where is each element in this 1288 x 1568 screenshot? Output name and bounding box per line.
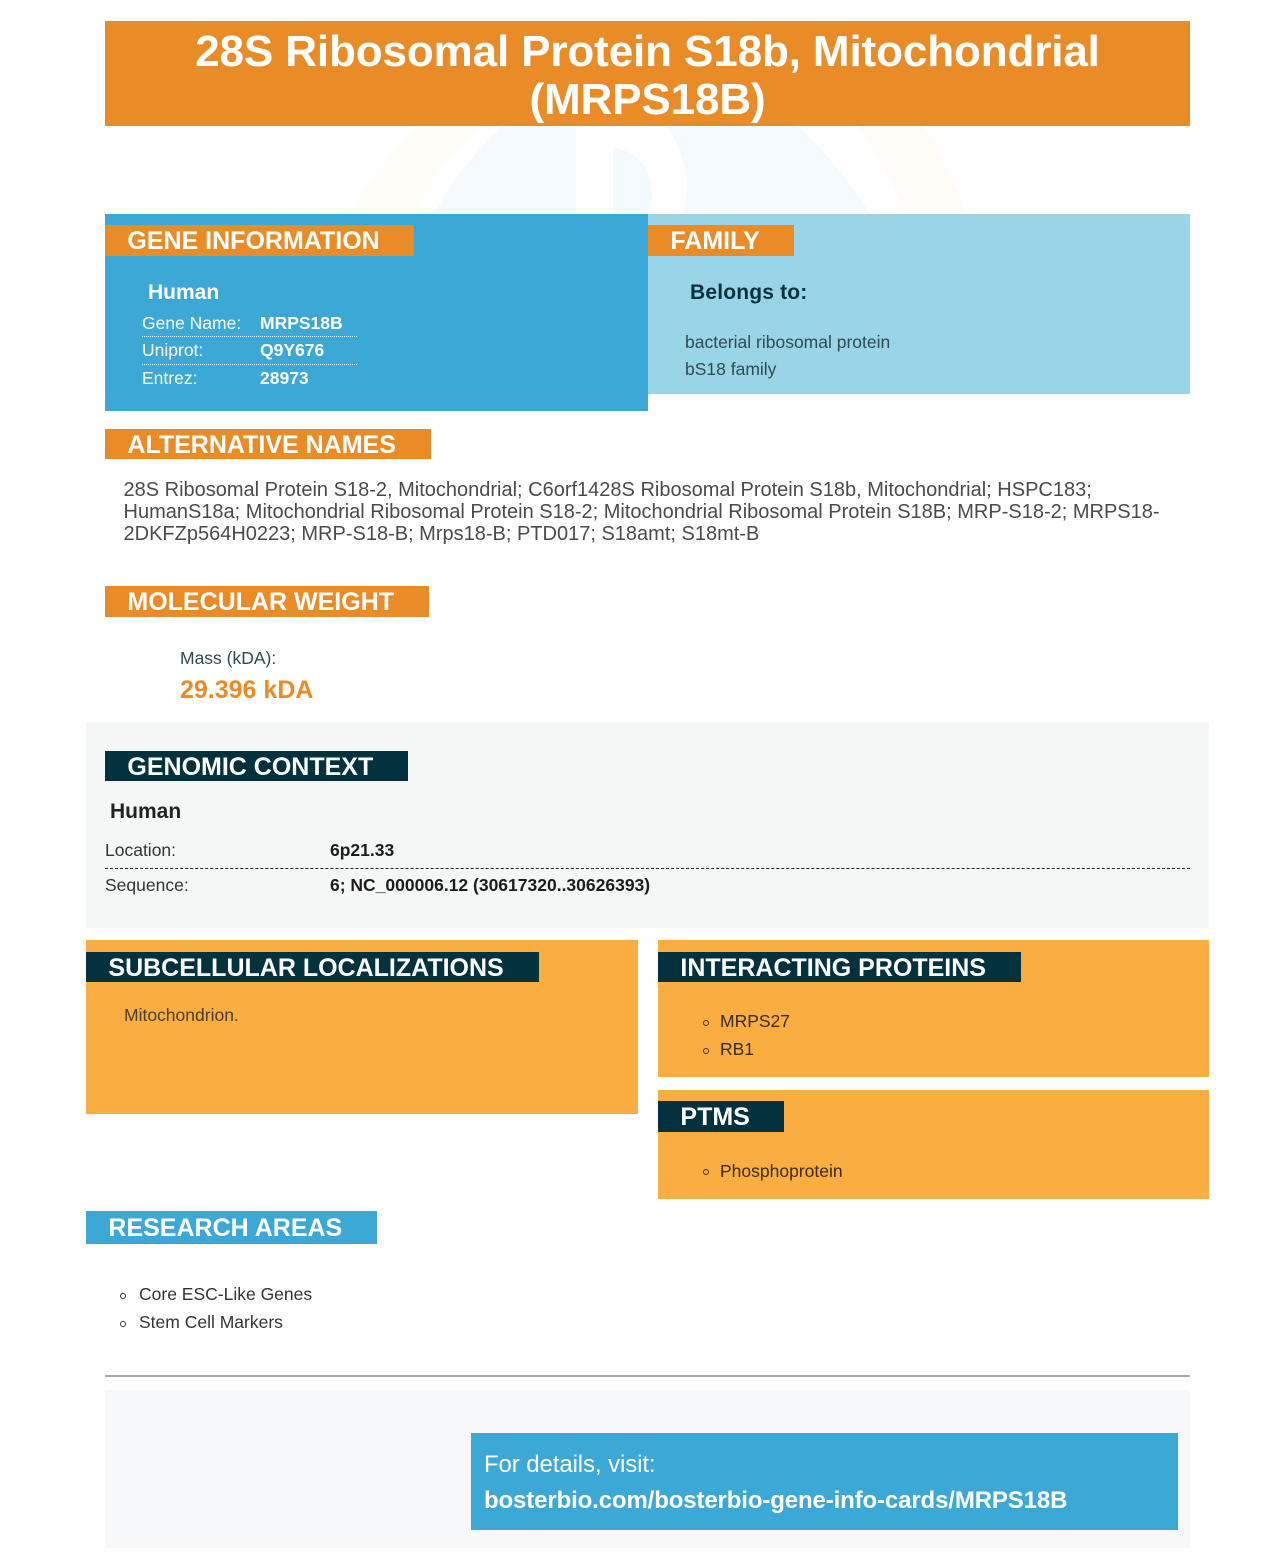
alternative names text (124, 479, 1160, 545)
title: 28S Ribosomal Protein S18b, Mitochondrial (195, 27, 1100, 76)
family text (685, 332, 890, 379)
panel: ptms (658, 1090, 1209, 1199)
sequence row (105, 875, 650, 895)
entrez row (142, 368, 309, 388)
heading: genomic context: GENOMIC CONTEXT (127, 753, 373, 781)
panel: gene information (105, 214, 648, 411)
entrez row: Entrez: (142, 368, 197, 388)
panel: genomic context (86, 722, 1209, 928)
location row: Location: (105, 840, 176, 860)
research areas list: Stem Cell Markers (139, 1312, 283, 1332)
sequence row: Sequence: (105, 875, 189, 895)
alternative names text: 2DKFZp564H0223; MRP-S18-B; Mrps18-B; PTD017; S18amt; S18mt-B (124, 523, 759, 545)
callout url: bosterbio.com/bosterbio-gene-info-cards/MRPS18B (484, 1487, 1067, 1514)
alternative names text: HumanS18a; Mitochondrial Ribosomal Protein S18-2; Mitochondrial Ribosomal Protein S18B; MRP-S18-2; MRPS18- (124, 501, 1160, 523)
alternative names text: 28S Ribosomal Protein S18-2, Mitochondrial; C6orf1428S Ribosomal Protein S18b, Mitochondrial; HSPC183; (124, 479, 1092, 501)
gene name row: Gene Name: (142, 313, 241, 333)
panel: subcellular localizations (86, 940, 638, 1114)
heading: gene information: GENE INFORMATION (127, 227, 380, 255)
gene name row (142, 312, 357, 337)
callout label: For details, visit: (484, 1451, 655, 1478)
heading: alternative names: ALTERNATIVE NAMES (127, 431, 396, 459)
heading: research areas: RESEARCH AREAS (108, 1214, 342, 1242)
uniprot row: Uniprot: (142, 340, 203, 360)
research areas list (120, 1284, 312, 1332)
research areas list: Core ESC-Like Genes (139, 1284, 312, 1304)
location row: 6p21.33 (330, 840, 394, 860)
mass label: Mass (kDA): (180, 648, 276, 668)
heading: subcellular localizations: SUBCELLULAR LOCALIZATIONS (108, 954, 504, 982)
heading: interacting proteins: INTERACTING PROTEINS (680, 954, 986, 982)
title (105, 21, 1190, 126)
localization text: Mitochondrion. (124, 1005, 239, 1025)
sequence row: 6; NC_000006.12 (30617320..30626393) (330, 875, 650, 895)
uniprot row: Q9Y676 (260, 340, 324, 360)
species label: Human (148, 281, 219, 304)
watermark logo (434, 126, 870, 214)
family text: bS18 family (685, 359, 776, 379)
location row (105, 839, 1190, 869)
belongs to label: Belongs to: (690, 281, 807, 304)
protein list (703, 1011, 790, 1059)
entrez row: 28973 (260, 368, 309, 388)
footer divider (105, 1375, 1190, 1377)
gene name row: MRPS18B (260, 313, 343, 333)
uniprot row (142, 339, 357, 365)
heading: family (648, 225, 794, 256)
protein list: RB1 (720, 1039, 754, 1059)
heading: molecular weight: MOLECULAR WEIGHT (127, 588, 394, 616)
protein list: MRPS27 (720, 1011, 790, 1031)
heading: research areas (86, 1211, 377, 1244)
heading: family: FAMILY (670, 227, 760, 255)
ptm list: Phosphoprotein (720, 1161, 843, 1181)
footer panel (105, 1390, 1190, 1548)
species label: Human (110, 800, 181, 823)
mass value: 29.396 kDA (180, 676, 313, 704)
heading: ptms (658, 1101, 784, 1132)
title: (MRPS18B) (529, 75, 766, 124)
callout: details link (471, 1433, 1178, 1530)
panel: family (648, 214, 1190, 394)
panel: interacting proteins (658, 940, 1209, 1077)
heading: ptms: PTMS (680, 1103, 750, 1131)
family text: bacterial ribosomal protein (685, 332, 890, 352)
